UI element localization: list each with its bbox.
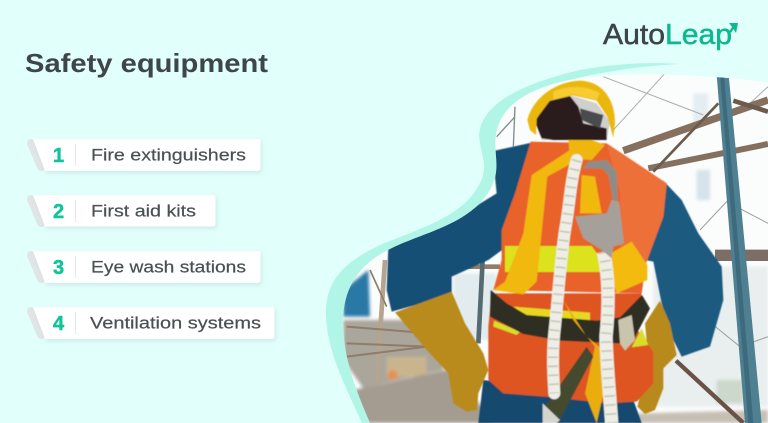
- center yellow panel: [580, 175, 602, 213]
- yellow strap right: [610, 242, 647, 293]
- title: Safety equipment: [25, 48, 268, 78]
- belt buckle: [618, 315, 635, 351]
- harness waist belt: [490, 290, 650, 343]
- lower yellow strap: [563, 300, 603, 423]
- neck strap: [568, 139, 606, 160]
- item 3: Eye wash stations: [91, 258, 246, 276]
- item 2: [31, 195, 216, 226]
- photo: construction worker with safety harness: [330, 60, 768, 423]
- item 2: First aid kits: [91, 202, 196, 220]
- list of safety equipment: [31, 139, 274, 339]
- hard hat: [527, 81, 615, 137]
- metal hook: [583, 160, 618, 202]
- item 1: Fire extinguishers: [91, 146, 246, 164]
- item 1: 1: [53, 145, 64, 167]
- reflective band: [505, 246, 610, 272]
- photo background: [330, 60, 768, 423]
- left scaffolding: [347, 107, 515, 383]
- worker: [387, 81, 723, 423]
- vest lower mesh: [488, 293, 653, 403]
- trousers: [478, 380, 642, 423]
- left glove: [395, 292, 488, 412]
- item 2: 2: [53, 201, 64, 223]
- right scaffolding: [603, 73, 768, 423]
- item 4: 4: [53, 313, 65, 335]
- right sleeve: [645, 181, 723, 357]
- yellow strap left: [493, 150, 572, 294]
- item 4: Ventilation systems: [90, 314, 261, 332]
- hair: [535, 96, 607, 140]
- vest upper: [493, 142, 667, 293]
- teal wave band behind the photo: [326, 63, 680, 423]
- logo: AutoLeap: [603, 19, 738, 51]
- blurred site scenery: [343, 93, 768, 423]
- logo wordmark: AutoLeap: [603, 19, 732, 51]
- right glove: [637, 301, 677, 414]
- white lanyard rope: [553, 160, 612, 423]
- scaffold pole: [717, 75, 762, 423]
- item 1: [31, 139, 260, 171]
- lower dark strap: [543, 347, 593, 423]
- item 4: [31, 307, 274, 339]
- item 3: [31, 251, 260, 283]
- lime patches below belt: [493, 321, 648, 347]
- lime band above belt: [513, 307, 590, 321]
- hard hat underside: [537, 96, 610, 140]
- head strap clip: [580, 108, 603, 128]
- left sleeve: [387, 143, 532, 312]
- item 3: 3: [53, 257, 64, 279]
- logo arrow: [729, 23, 738, 33]
